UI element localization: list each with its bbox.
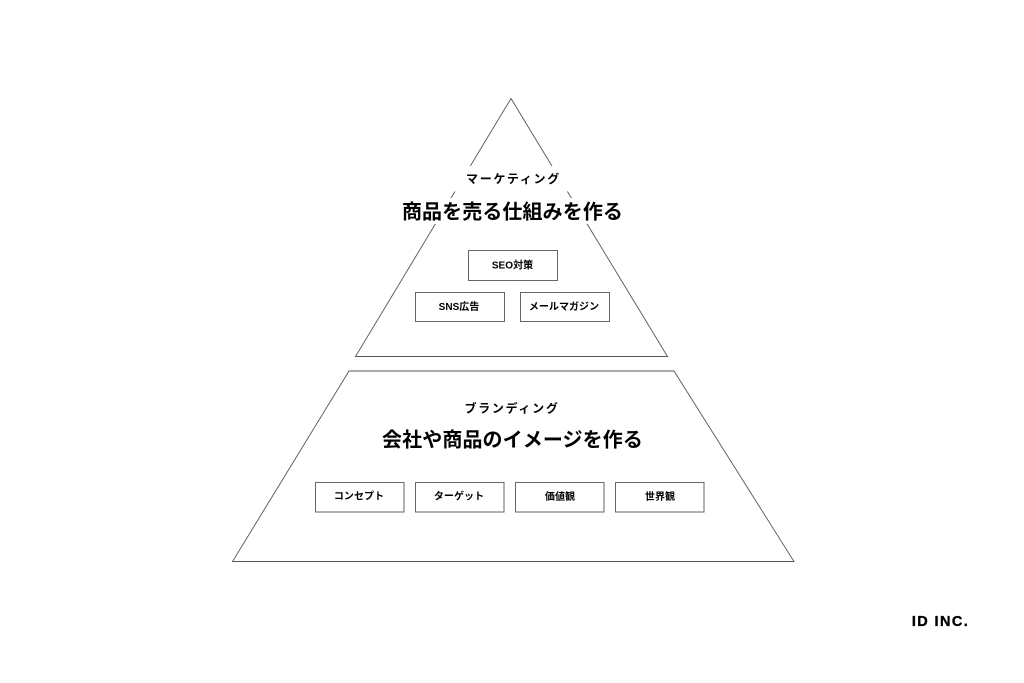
triangle outline bbox=[356, 98, 668, 356]
box: values bbox=[516, 482, 604, 512]
heading: build the system that sells: 商品を売る仕組みを作る bbox=[402, 200, 623, 224]
box: email magazine bbox=[520, 292, 610, 322]
box: SNS ads: SNS広告 bbox=[439, 300, 479, 313]
panel: marketing triangle bbox=[356, 98, 668, 356]
box: target bbox=[416, 482, 504, 512]
box: values: 価値観 bbox=[545, 490, 575, 503]
heading label: marketing bbox=[425, 166, 597, 192]
box: email magazine: メールマガジン bbox=[529, 300, 599, 313]
panel: branding trapezoid bbox=[232, 371, 794, 562]
box: worldview bbox=[616, 482, 704, 512]
box: concept: コンセプト bbox=[334, 490, 384, 502]
trapezoid outline bbox=[232, 371, 794, 562]
box: SEO: SEO対策 bbox=[492, 258, 533, 272]
box: SNS ads bbox=[416, 292, 504, 322]
box: concept bbox=[316, 482, 404, 512]
box: SEO bbox=[468, 250, 558, 280]
box: worldview: 世界観 bbox=[645, 490, 675, 503]
heading label: branding: ブランディング bbox=[464, 400, 560, 416]
heading: build the company image: 会社や商品のイメージを作る bbox=[382, 428, 643, 452]
heading label: marketing: マーケティング bbox=[466, 171, 561, 186]
box: target: ターゲット bbox=[434, 490, 484, 502]
logo: ID INC.: ID INC. bbox=[912, 614, 969, 630]
